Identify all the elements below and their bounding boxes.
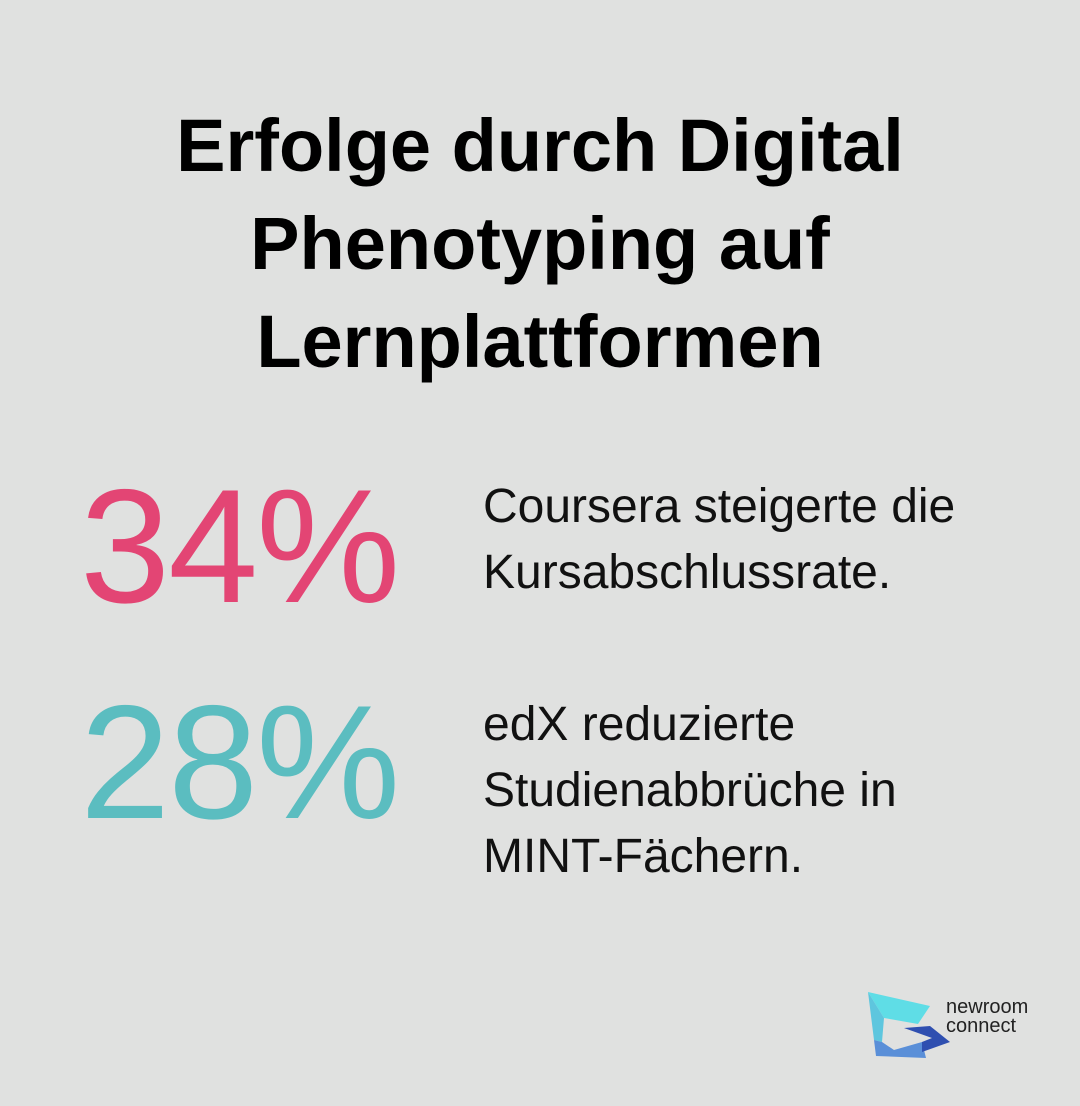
- stat 2 number: 28%: [80, 672, 398, 853]
- stat 2 text: MINT-Fächern.: [483, 830, 803, 883]
- title: Phenotyping auf: [250, 202, 830, 285]
- stat 1 text: Coursera steigerte die: [483, 480, 955, 533]
- logo text: connect: [946, 1015, 1016, 1037]
- title: Lernplattformen: [256, 300, 824, 383]
- stat 1 number: 34%: [80, 456, 398, 637]
- title: Erfolge durch Digital: [176, 104, 904, 187]
- title: [176, 104, 904, 383]
- stat 2 text: edX reduzierte: [483, 698, 795, 751]
- stat 2 text: [483, 698, 897, 883]
- stat 1 text: Kursabschlussrate.: [483, 546, 891, 599]
- icon: logo mark: [868, 992, 950, 1058]
- stat 1 text: [483, 480, 955, 599]
- logo: [868, 992, 1028, 1058]
- logo text: newroom: [946, 996, 1028, 1018]
- logo text: [946, 996, 1028, 1037]
- stat 2 text: Studienabbrüche in: [483, 764, 897, 817]
